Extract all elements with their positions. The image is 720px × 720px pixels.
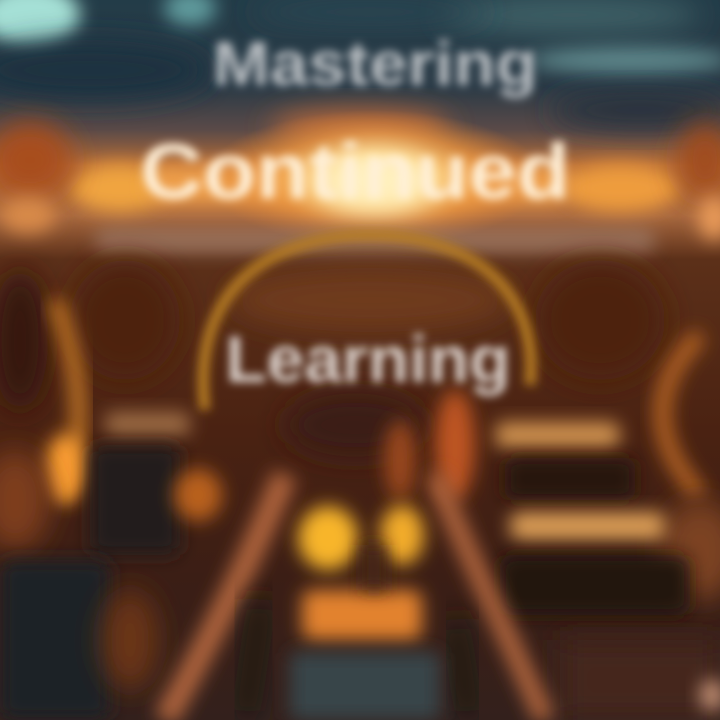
bottom centre panel	[290, 652, 440, 720]
heading: first line: Mastering	[212, 30, 538, 99]
horizon glow	[70, 110, 680, 254]
centre flame lights	[298, 390, 475, 640]
golden ring	[203, 235, 531, 410]
left device block	[0, 412, 222, 720]
dark canyon centre	[70, 260, 665, 457]
right book stack	[495, 422, 720, 720]
heading: third line: Learning	[226, 322, 510, 396]
heading: second line: Continued	[140, 127, 570, 215]
converging path rails	[165, 475, 545, 720]
left rock column	[0, 122, 85, 550]
right rock column	[660, 122, 720, 600]
sky clouds	[0, 0, 720, 146]
